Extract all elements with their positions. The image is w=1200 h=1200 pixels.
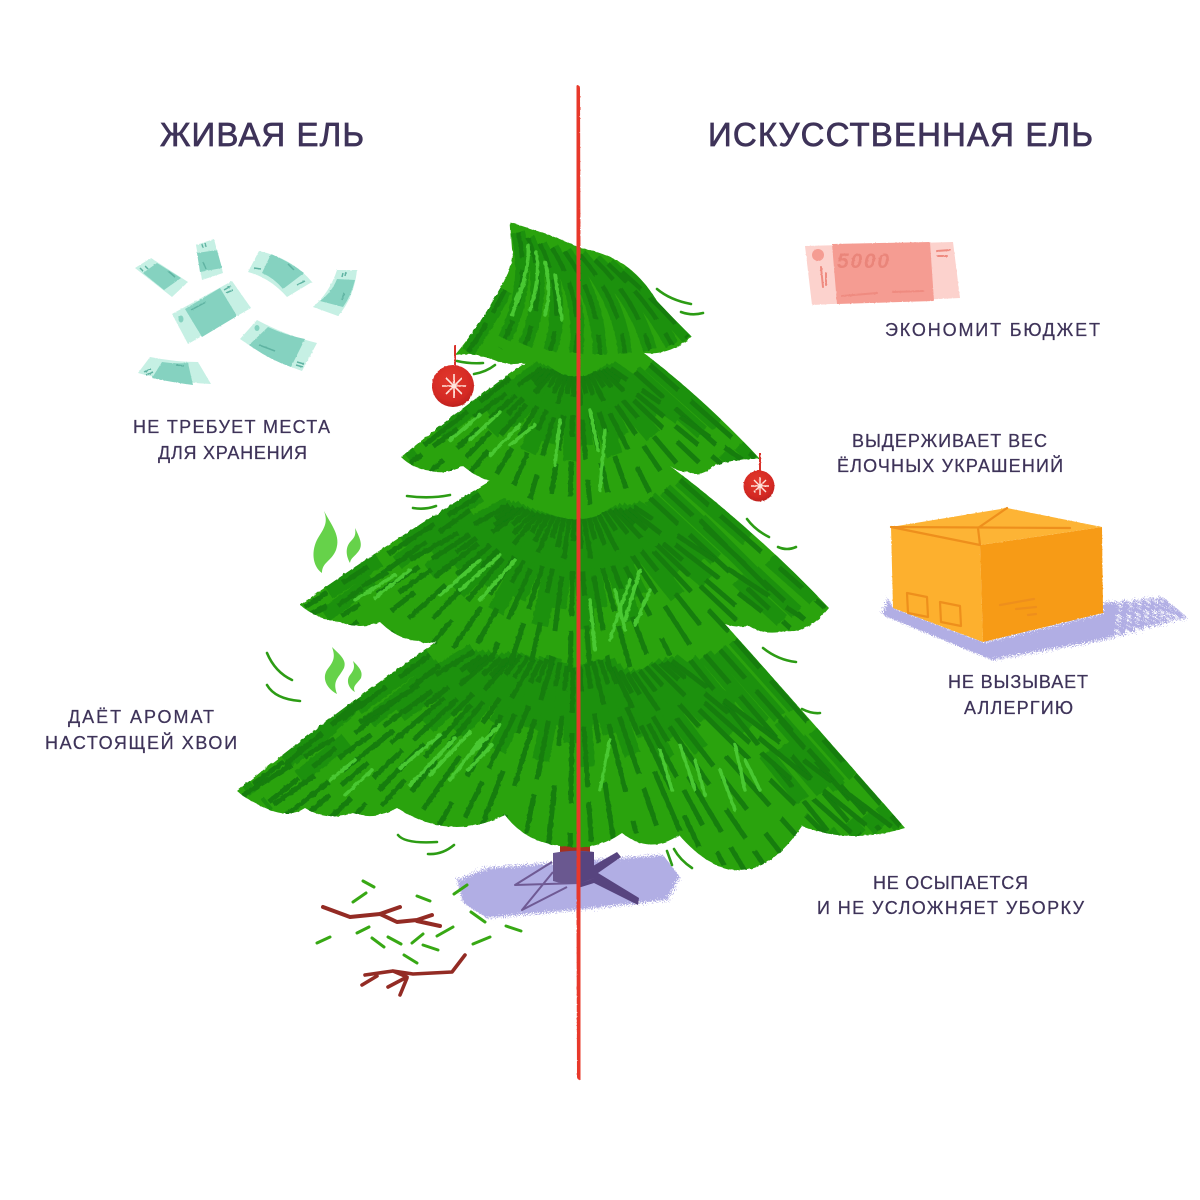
banknote 7 — [138, 357, 211, 385]
trunk — [560, 840, 590, 856]
tree stand — [515, 840, 639, 910]
icon: flying banknotes — [135, 239, 357, 385]
dark needle strokes tier 4 — [240, 651, 900, 873]
text: no allergy — [948, 672, 1088, 718]
light needles — [330, 245, 760, 810]
text: pine aroma: НАСТОЯЩЕЙ ХВОИ — [45, 732, 237, 753]
dark needle strokes tier 3 — [310, 505, 810, 673]
fallen twig upper — [323, 907, 440, 926]
left wire legs — [515, 862, 580, 910]
text: no storage needed: ДЛЯ ХРАНЕНИЯ — [158, 443, 307, 463]
icon: 5000 banknote: 5000 — [837, 250, 889, 273]
icon: 5000 banknote — [805, 242, 960, 305]
box top — [891, 508, 1102, 545]
tree silhouette — [237, 222, 905, 870]
text: does not shed: И НЕ УСЛОЖНЯЕТ УБОРКУ — [817, 898, 1085, 918]
icon: cardboard box with shadow — [882, 508, 1193, 660]
ornament: left red ball — [432, 345, 474, 407]
banknote 3 — [248, 251, 312, 297]
text: does not shed — [817, 873, 1085, 918]
icon: scent wisps lower — [325, 647, 362, 694]
dark needle strokes tier 2 — [410, 368, 750, 505]
stand cylinder — [553, 851, 594, 884]
ornament: right red ball — [744, 453, 774, 502]
dark needle strokes along tier edges — [245, 365, 900, 840]
text: no storage needed — [133, 417, 330, 463]
text: holds ornaments: ЁЛОЧНЫХ УКРАШЕНИЙ — [837, 455, 1063, 476]
text: no allergy: НЕ ВЫЗЫВАЕТ — [948, 672, 1088, 692]
text: holds ornaments: ВЫДЕРЖИВАЕТ ВЕС — [852, 431, 1047, 451]
title: live tree: ЖИВАЯ ЕЛЬ — [160, 116, 364, 153]
dark needle strokes tier 1 — [468, 232, 688, 358]
right solid legs — [578, 852, 639, 905]
text: saves budget: ЭКОНОМИТ БЮДЖЕТ — [885, 320, 1100, 340]
banknote 2 — [196, 239, 223, 280]
red divider line — [577, 88, 580, 1077]
icon: scent wisps upper — [313, 511, 361, 573]
banknote 5 — [172, 281, 251, 344]
text: holds ornaments — [837, 431, 1063, 476]
fallen twig lower — [362, 955, 465, 995]
text: no storage needed: НЕ ТРЕБУЕТ МЕСТА — [133, 417, 330, 437]
box right face — [980, 527, 1103, 642]
banknote 1 — [135, 258, 188, 297]
box shadow — [882, 586, 1193, 660]
motion ticks around tree — [267, 289, 820, 868]
box tape and marks — [891, 508, 1070, 626]
fallen pine needles — [317, 881, 521, 963]
christmas tree — [237, 222, 905, 873]
mid-tone upper zones of each tier — [240, 232, 900, 873]
text: does not shed: НЕ ОСЫПАЕТСЯ — [873, 873, 1028, 893]
text: pine aroma — [45, 707, 237, 753]
box left face — [891, 527, 983, 642]
text: pine aroma: ДАЁТ АРОМАТ — [68, 707, 214, 727]
banknote 6 — [240, 320, 317, 371]
needle shading — [240, 232, 900, 873]
text: no allergy: АЛЛЕРГИЮ — [964, 698, 1073, 718]
floor shadow under stand — [457, 855, 680, 918]
banknote 4 — [313, 270, 357, 316]
title: artificial tree: ИСКУССТВЕННАЯ ЕЛЬ — [708, 116, 1093, 153]
